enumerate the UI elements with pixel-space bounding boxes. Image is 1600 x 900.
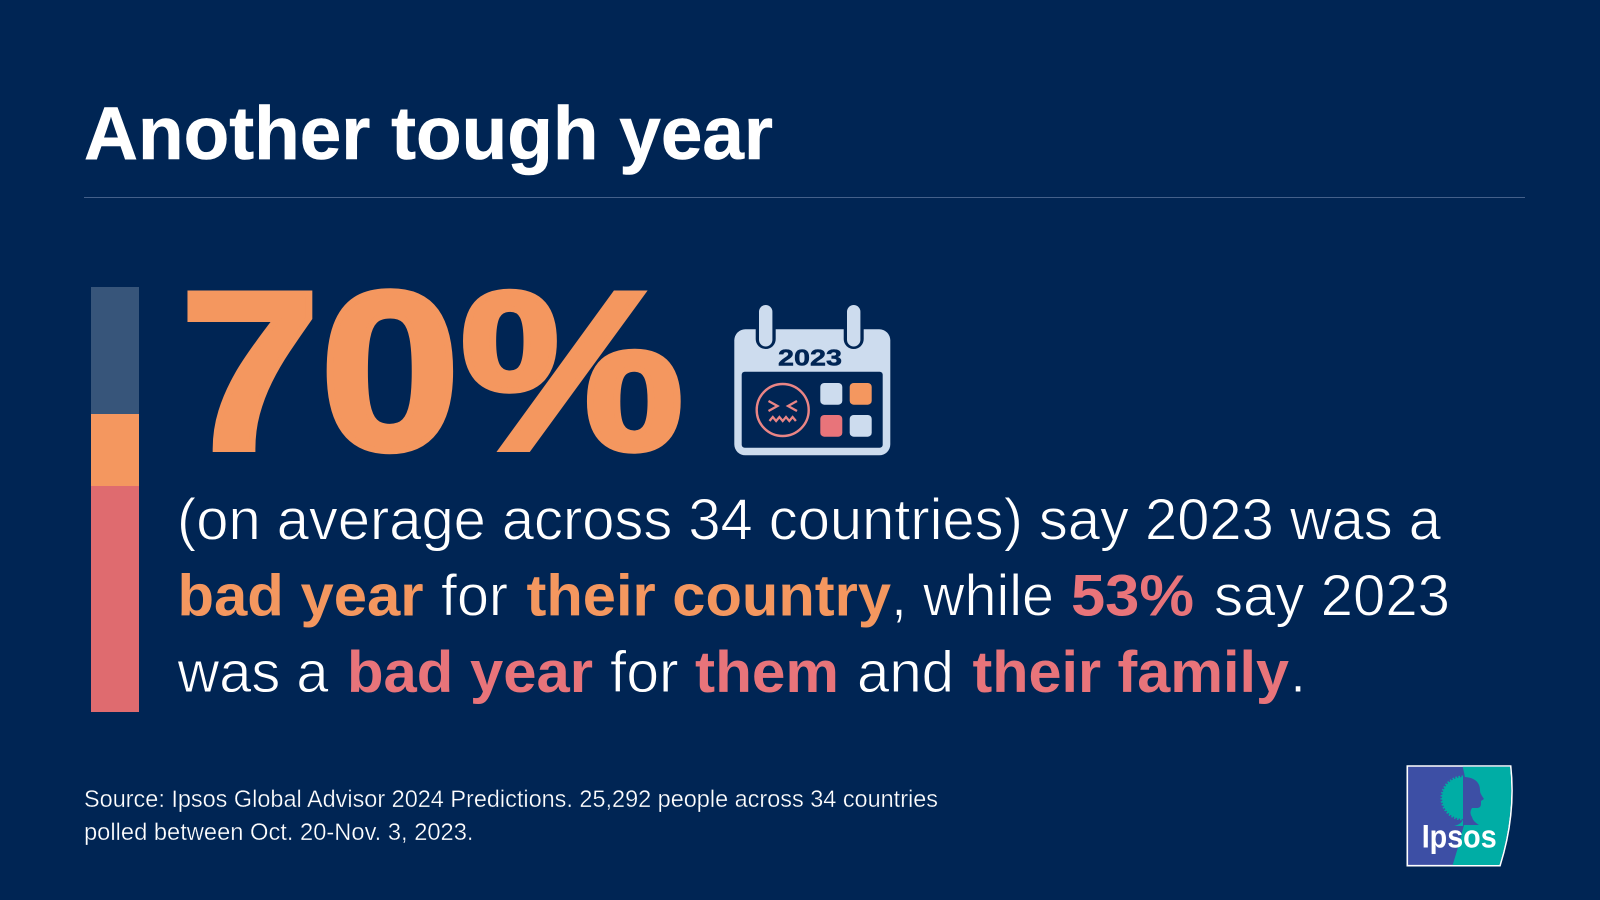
source note: polled between Oct. 20-Nov. 3, 2023. bbox=[84, 819, 474, 846]
body text line 2: say 2023 bbox=[1214, 564, 1450, 628]
logo: Ipsos: Ipsos bbox=[1422, 818, 1497, 854]
body text line 3: bad year bbox=[347, 640, 593, 705]
icon: calendar 2023 with upset face bbox=[734, 305, 890, 455]
body text line 3: . bbox=[1290, 640, 1306, 705]
body text line 3: them bbox=[695, 640, 839, 705]
body text line 2 bbox=[178, 564, 1450, 628]
source note bbox=[84, 786, 938, 846]
title: Another tough year bbox=[84, 91, 773, 175]
body text line 3: for bbox=[610, 640, 679, 705]
icon: calendar 2023 with upset face: 2023 bbox=[778, 345, 842, 371]
body text line 3: was a bbox=[177, 640, 329, 705]
body text line 1: (on average across 34 countries) say 2023 was a bbox=[177, 488, 1442, 552]
source note: Source: Ipsos Global Advisor 2024 Predictions. 25,292 people across 34 countries bbox=[84, 786, 938, 813]
body text line 2: 53% bbox=[1071, 564, 1194, 628]
body text line 2: , while bbox=[891, 564, 1054, 628]
body text line 3 bbox=[177, 640, 1306, 705]
body text line 3: and bbox=[857, 640, 954, 705]
body text line 3: their family bbox=[972, 640, 1289, 705]
body text line 2: for bbox=[441, 564, 508, 628]
logo: Ipsos bbox=[1407, 766, 1512, 866]
stacked vertical bar bbox=[91, 287, 139, 712]
body text line 2: bad year bbox=[178, 564, 424, 628]
big statistic: 70%: 70% bbox=[180, 244, 684, 497]
body text line 2: their country bbox=[526, 564, 891, 628]
